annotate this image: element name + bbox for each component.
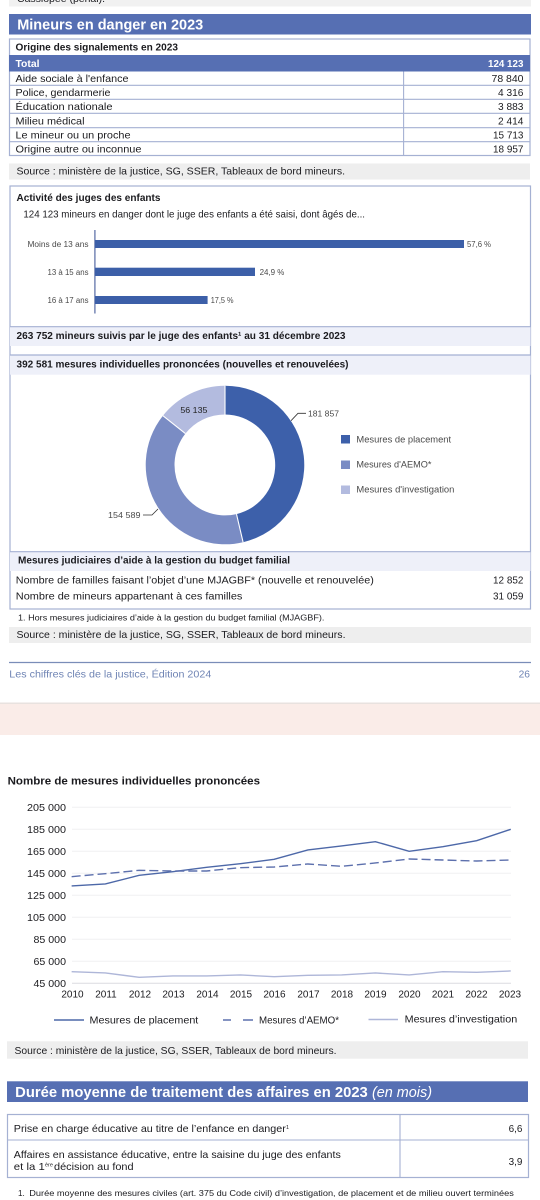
donut chart: mesures <box>108 386 339 544</box>
heading: durée moyenne de traitement <box>7 1081 528 1102</box>
page separator band <box>0 702 540 735</box>
segment: placement <box>225 386 304 542</box>
y axis labels: 45 000 <box>34 978 66 990</box>
y axis labels: 205 000 <box>27 802 66 814</box>
table: origine des signalements <box>9 39 530 156</box>
x axis labels: 2022 <box>465 990 488 1001</box>
heading: Mineurs en danger en 2023 <box>9 14 531 34</box>
bar chart: âges: 24,9 % <box>260 268 284 277</box>
series: investigation <box>72 971 511 977</box>
line chart legend <box>54 1014 517 1027</box>
x axis labels: 2015 <box>230 990 253 1001</box>
segment: investigation <box>163 386 225 434</box>
table rows: Éducation nationale <box>16 100 113 113</box>
y axis labels: 145 000 <box>27 868 66 880</box>
panel subtitle: 124 123 mineurs en danger dont le juge des enfants a été saisi, dont âgés de... <box>23 209 365 221</box>
table title: Origine des signalements en 2023 <box>16 42 178 54</box>
bar chart: âges <box>28 230 491 314</box>
y axis labels: 185 000 <box>27 824 66 836</box>
y axis labels: 125 000 <box>27 890 66 902</box>
table rows: Aide sociale à l'enfance <box>16 73 129 85</box>
table rows: 3 883 <box>498 101 524 113</box>
bar chart: âges: 17,5 % <box>211 296 234 305</box>
heading: durée moyenne de traitement: (en mois) <box>372 1085 432 1101</box>
bar chart: âges: 13 à 15 ans <box>48 268 88 277</box>
line chart legend: Mesures d’investigation <box>405 1014 517 1026</box>
footnote 2: Durée moyenne des mesures civiles (art. 375 du Code civil) d’investigation, de placement et de milieu ouvert terminées <box>29 1189 514 1198</box>
table rows: 4 316 <box>498 87 524 99</box>
table rows: 2 414 <box>498 115 524 127</box>
total row: Total <box>16 58 40 70</box>
panel: mesures judiciaires d'aide à la gestion du budget familial: Nombre de familles faisant l’objet d’une MJAGBF* (nouvelle et renouvelée) <box>16 574 374 586</box>
x axis labels: 2018 <box>331 990 354 1001</box>
y axis labels: 165 000 <box>27 846 66 858</box>
row: assistance éducative: Affaires en assistance éducative, entre la saisine du juge des enfants <box>14 1149 341 1161</box>
total row <box>9 55 530 72</box>
panel: mesures judiciaires d'aide à la gestion du budget familial: 12 852 <box>493 574 524 586</box>
total row: 124 123 <box>488 58 524 70</box>
x axis labels: 2016 <box>263 990 286 1001</box>
footnote 2: 1. <box>18 1189 25 1198</box>
source 1 <box>9 164 530 180</box>
table rows: Police, gendarmerie <box>16 87 111 99</box>
row: assistance éducative: ère <box>45 1162 53 1168</box>
heading: Mineurs en danger en 2023: Mineurs en danger en 2023 <box>17 16 203 34</box>
label 154 589 <box>108 509 158 520</box>
donut legend: Mesures d'investigation <box>356 485 454 495</box>
x axis labels: 2013 <box>162 990 185 1001</box>
source 1: Source : ministère de la justice, SG, SSER, Tableaux de bord mineurs. <box>16 166 345 178</box>
donut legend: Mesures de placement <box>356 434 452 444</box>
label 56 135: 56 135 <box>180 405 208 415</box>
row: prise en charge: Prise en charge éducative au titre de l’enfance en danger <box>14 1123 286 1135</box>
table rows: 78 840 <box>492 73 524 85</box>
y axis labels: 85 000 <box>34 934 66 946</box>
x axis labels: 2023 <box>499 990 522 1001</box>
row: prise en charge: 6,6 <box>509 1123 523 1135</box>
row: assistance éducative: et la 1 <box>14 1161 45 1173</box>
series: placement <box>72 829 511 886</box>
series: AEMO <box>72 859 511 877</box>
band: mineurs suivis <box>10 327 531 346</box>
row: assistance éducative <box>14 1149 523 1173</box>
row: assistance éducative: décision au fond <box>54 1161 134 1173</box>
x axis labels: 2012 <box>129 990 152 1001</box>
x axis labels: 2010 <box>61 990 84 1001</box>
y axis labels: 65 000 <box>34 956 66 968</box>
bar chart: âges: Moins de 13 ans <box>28 240 88 249</box>
y axis labels <box>27 802 66 990</box>
x axis labels: 2017 <box>297 990 320 1001</box>
x axis labels <box>61 990 522 1001</box>
band: mesures individuelles: 392 581 mesures individuelles prononcées (nouvelles et renouvelées) <box>16 359 348 371</box>
y axis labels: 105 000 <box>27 912 66 924</box>
line chart: mesures individuelles <box>27 802 522 1001</box>
segment: AEMO <box>146 416 243 544</box>
label 154 589: 154 589 <box>108 510 141 520</box>
page footer: Les chiffres clés de la justice, Édition 2024 <box>9 668 211 680</box>
x axis labels: 2021 <box>432 990 455 1001</box>
band: mineurs suivis: 263 752 mineurs suivis par le juge des enfants¹ au 31 décembre 2023 <box>16 330 346 342</box>
x axis labels: 2020 <box>398 990 421 1001</box>
line chart legend: Mesures d’AEMO* <box>259 1015 339 1027</box>
row: assistance éducative: 3,9 <box>509 1156 523 1168</box>
page footer <box>9 662 531 680</box>
x axis labels: 2014 <box>196 990 219 1001</box>
panel: mesures judiciaires d'aide à la gestion du budget familial: Mesures judiciaires d’aide à la gestion du budget familial <box>18 555 290 567</box>
panel: mesures judiciaires d'aide à la gestion du budget familial: Nombre de mineurs appartenant à ces familles <box>16 591 242 603</box>
bar chart: âges: 57,6 % <box>467 240 491 249</box>
row: prise en charge: 1 <box>286 1125 289 1131</box>
label 181 857 <box>291 408 339 421</box>
table: durée moyenne <box>7 1114 529 1178</box>
source 3 <box>7 1041 528 1059</box>
band: mesures individuelles <box>10 355 531 375</box>
table rows <box>16 73 524 156</box>
chart title: Nombre de mesures individuelles prononcées <box>8 776 260 788</box>
page footer: 26 <box>519 668 530 680</box>
source 2: Source : ministère de la justice, SG, SSER, Tableaux de bord mineurs. <box>16 629 346 641</box>
table rows: 15 713 <box>493 130 524 142</box>
table rows: Le mineur ou un proche <box>16 130 131 142</box>
donut legend <box>341 434 454 495</box>
source 3: Source : ministère de la justice, SG, SSER, Tableaux de bord mineurs. <box>14 1045 336 1057</box>
table rows: 18 957 <box>493 144 524 156</box>
bar chart: âges: 16 à 17 ans <box>48 296 88 305</box>
x axis labels: 2011 <box>95 990 117 1001</box>
source 2 <box>9 627 531 643</box>
panel: mesures judiciaires d'aide à la gestion du budget familial: 31 059 <box>493 591 524 603</box>
panel heading: Activité des juges des enfants <box>16 192 161 204</box>
series lines <box>72 829 511 977</box>
line chart legend: Mesures de placement <box>90 1015 198 1027</box>
previous page source remnant <box>9 0 531 6</box>
row: prise en charge <box>14 1123 523 1135</box>
table rows: Milieu médical <box>16 115 84 127</box>
footnote 1: 1. Hors mesures judiciaires d’aide à la gestion du budget familial (MJAGBF). <box>18 613 324 622</box>
panel: mesures judiciaires d'aide à la gestion du budget familial <box>10 552 531 603</box>
label 181 857: 181 857 <box>308 408 339 418</box>
table rows: Origine autre ou inconnue <box>16 144 142 156</box>
x axis labels: 2019 <box>364 990 387 1001</box>
donut legend: Mesures d'AEMO* <box>356 460 432 470</box>
heading: durée moyenne de traitement: Durée moyenne de traitement des affaires en 2023 <box>15 1085 368 1101</box>
